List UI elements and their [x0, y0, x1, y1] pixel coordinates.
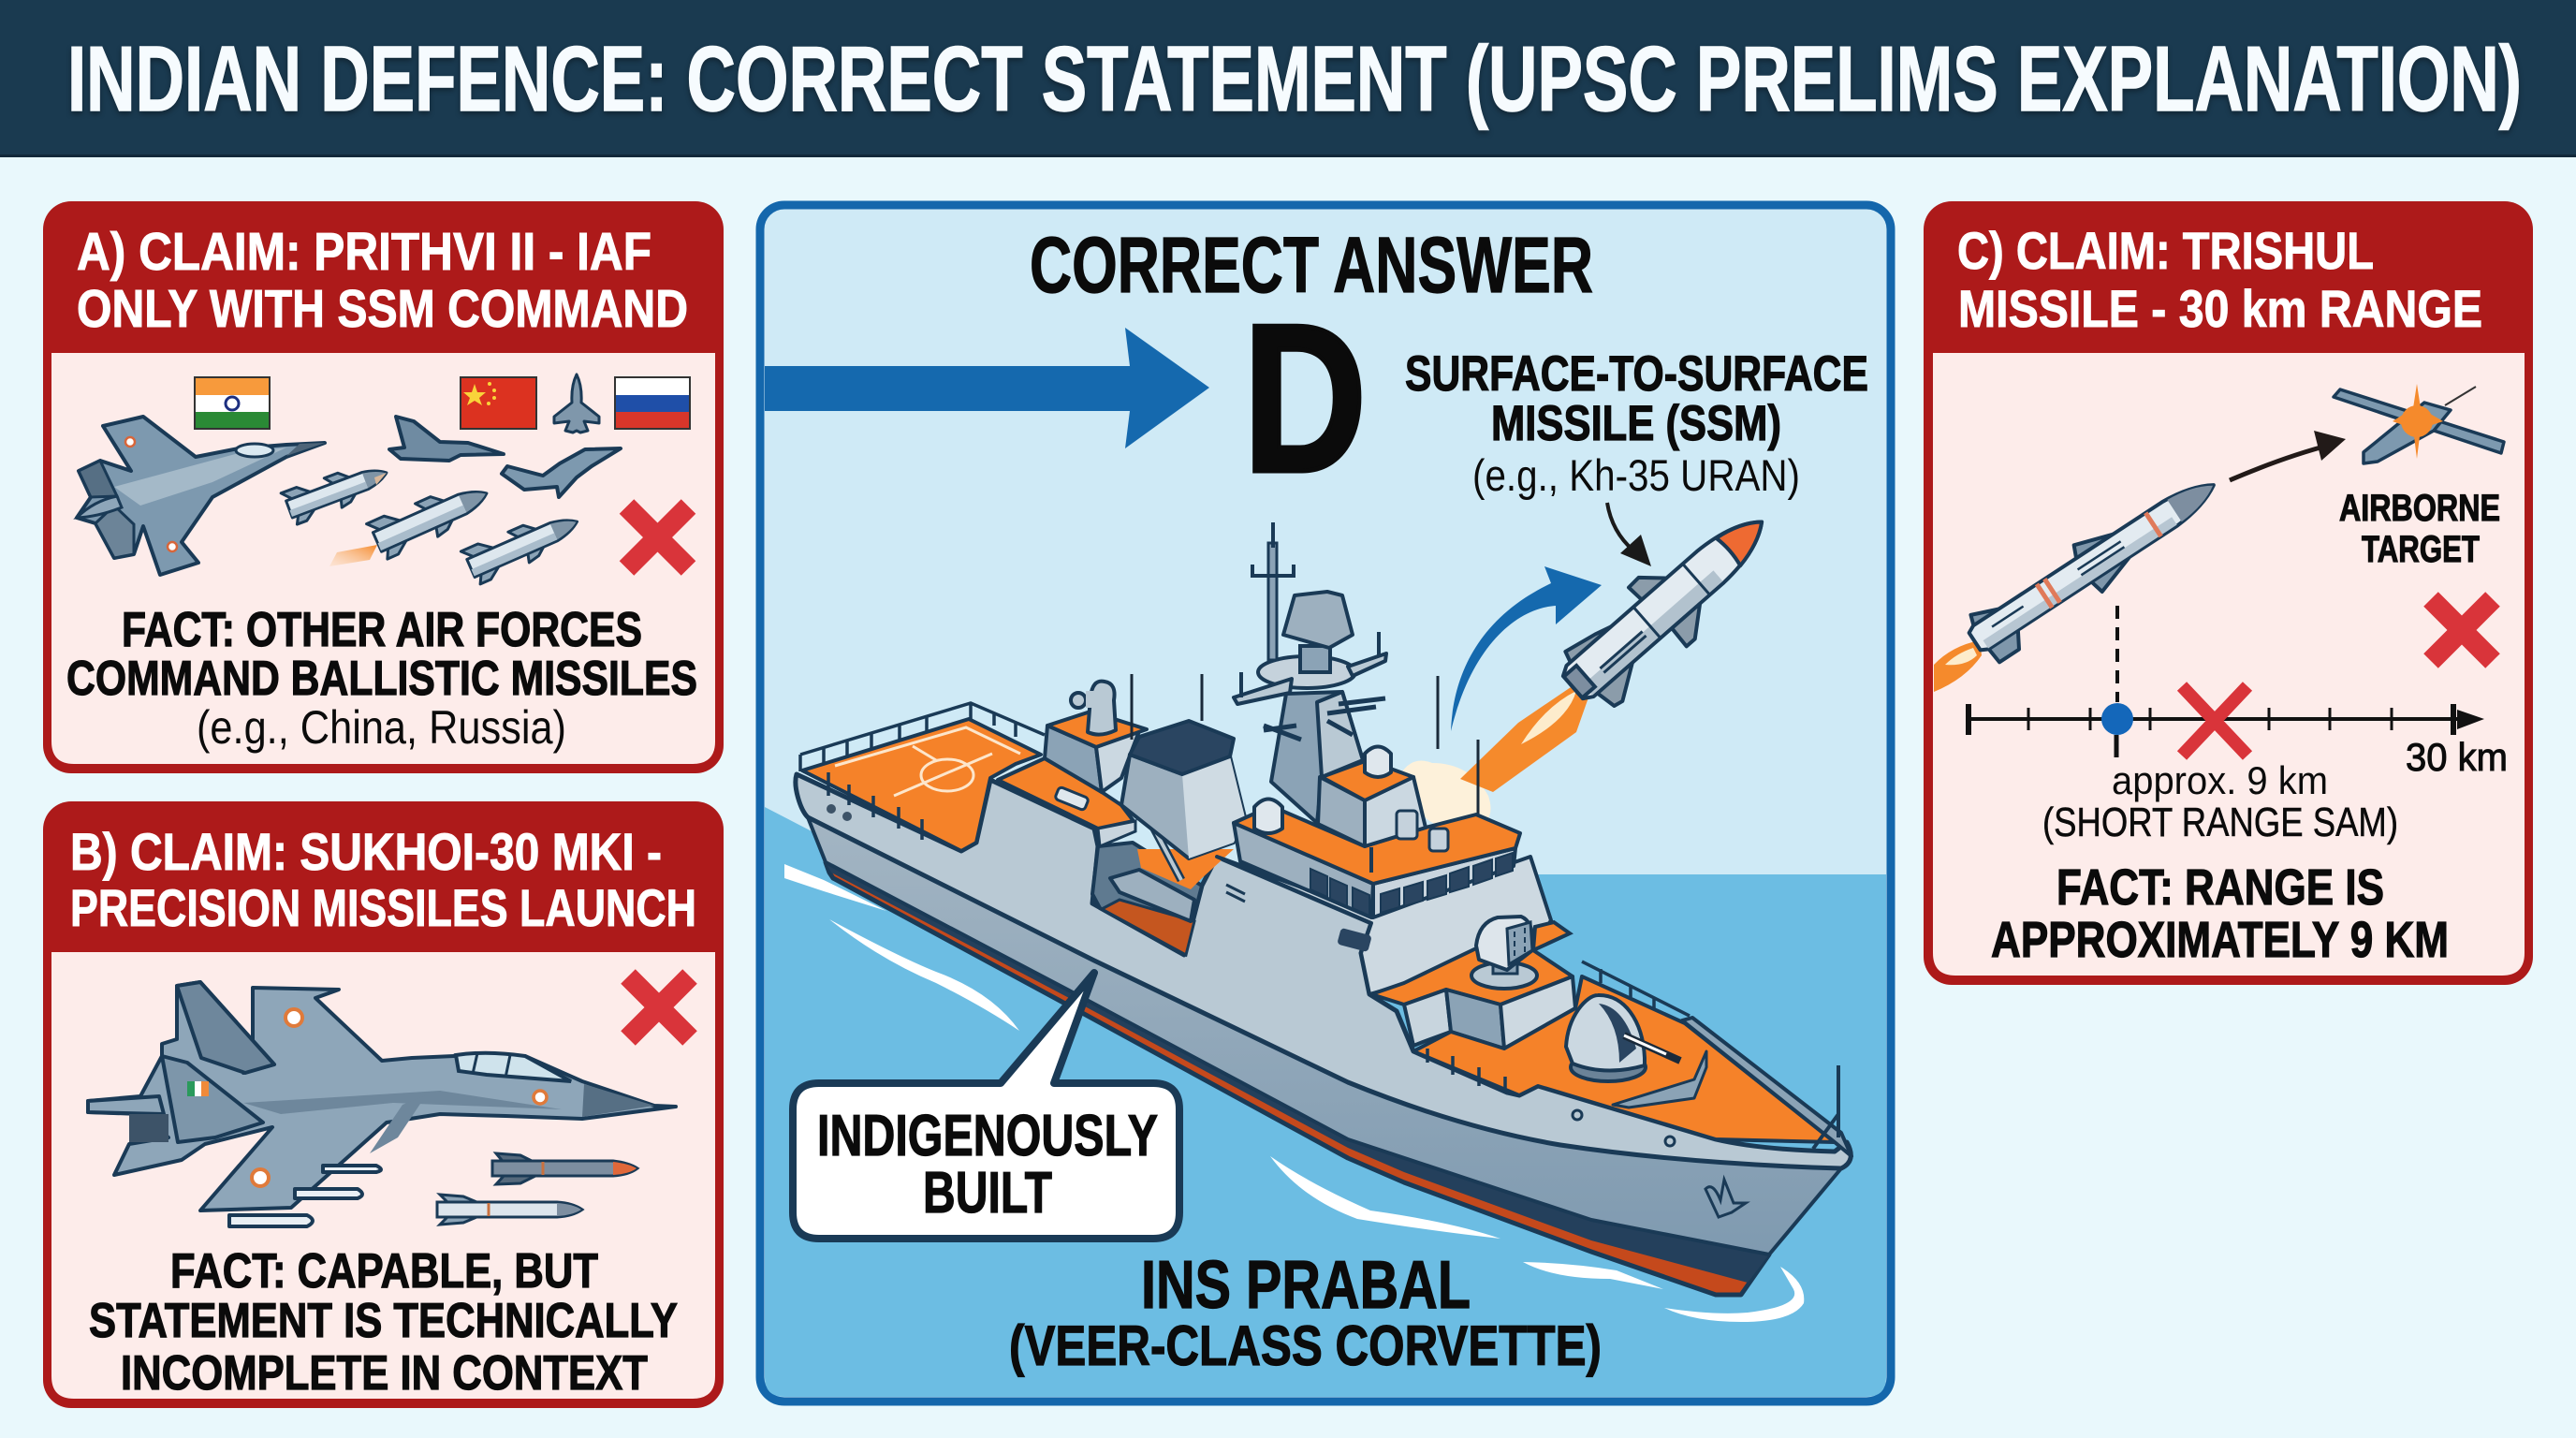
- callout: indigenously built: BUILT: [923, 1161, 1052, 1225]
- heading: claim C: MISSILE - 30 km RANGE: [1958, 279, 2482, 338]
- icon: Trishul missile with flame: [1934, 463, 2231, 692]
- icon: China flag: [461, 377, 536, 429]
- ship name: INS PRABAL: [1141, 1248, 1471, 1323]
- text: fact C: [1991, 859, 2449, 968]
- text: airborne target: AIRBORNE: [2339, 488, 2500, 529]
- boat bay: [1092, 814, 1234, 955]
- range scale: (SHORT RANGE SAM): [2042, 800, 2398, 845]
- icon: jet 3: [502, 448, 621, 497]
- wave strokes: [784, 864, 1804, 1322]
- panel: correct answer: [760, 205, 1891, 1401]
- hull light side: [796, 774, 1851, 1168]
- icon: airborne target: [2334, 384, 2504, 463]
- bridge block: [1217, 806, 1551, 994]
- heading: correct answer: CORRECT ANSWER: [1030, 221, 1593, 309]
- heading: claim B: PRECISION MISSILES LAUNCH: [70, 878, 696, 937]
- heading: claim A: A) CLAIM: PRITHVI II - IAF: [77, 222, 651, 282]
- icon: missile 1: [281, 456, 392, 526]
- text: fact A: COMMAND BALLISTIC MISSILES: [66, 652, 697, 706]
- hull grey band: [808, 817, 1841, 1255]
- icon: fighter jet: [77, 417, 325, 575]
- heading: claim B: B) CLAIM: SUKHOI-30 MKI -: [70, 822, 662, 881]
- hull keel red band: [826, 862, 1769, 1295]
- panel: claim C: [1924, 201, 2533, 985]
- text: fact A: (e.g., China, Russia): [197, 701, 566, 754]
- icon: missile 3: [461, 504, 584, 586]
- icon: Sukhoi-30 MKI jet: [88, 982, 676, 1226]
- arrow: missile to target: [2230, 431, 2346, 480]
- text: fact A: FACT: OTHER AIR FORCES: [122, 603, 642, 657]
- heading: claim C: C) CLAIM: TRISHUL: [1957, 221, 2374, 280]
- callout: indigenously built: [793, 973, 1179, 1239]
- upper deckhouse: [1254, 747, 1448, 873]
- text: airborne target: [2339, 488, 2500, 570]
- arrow: label to missile: [1607, 503, 1651, 566]
- main gun: [1566, 995, 1680, 1081]
- CIWS mount: [1471, 917, 1537, 989]
- ship name: [1009, 1248, 1602, 1377]
- text: fact B: INCOMPLETE IN CONTEXT: [121, 1346, 648, 1401]
- illustration: INS Prabal corvette: [784, 522, 1852, 1322]
- icon: India flag: [195, 377, 270, 429]
- flame and smoke: [1397, 683, 1588, 831]
- mid orange deck: [998, 758, 1134, 829]
- icon: red cross: [627, 506, 689, 568]
- text: surface-to-surface missile: SURFACE-TO-SURFACE: [1405, 346, 1868, 402]
- title banner: [0, 0, 2576, 157]
- arrow: pointing to answer: [765, 328, 1209, 448]
- hull dark band: [826, 862, 1769, 1283]
- mast: [1234, 522, 1386, 823]
- range scale: approx. 9 km: [2112, 758, 2328, 802]
- text: airborne target: TARGET: [2362, 529, 2480, 570]
- text: fact B: STATEMENT IS TECHNICALLY: [89, 1294, 678, 1348]
- arrow: missile trajectory: [1451, 566, 1602, 731]
- text: fact B: FACT: CAPABLE, BUT: [170, 1244, 598, 1299]
- funnel: [1121, 721, 1245, 858]
- foredeck: [1371, 922, 1852, 1217]
- range scale: [1969, 606, 2508, 845]
- text: fact C: FACT: RANGE IS: [2056, 859, 2384, 916]
- text: surface-to-surface missile: [1405, 346, 1868, 500]
- text: fact C: APPROXIMATELY 9 KM: [1991, 912, 2449, 968]
- deck block with exhaust: [1045, 682, 1147, 792]
- heading: claim C: [1957, 221, 2482, 338]
- text: surface-to-surface missile: (e.g., Kh-35 URAN): [1472, 450, 1800, 500]
- heading: claim B: [70, 822, 696, 937]
- ship name: (VEER-CLASS CORVETTE): [1009, 1314, 1602, 1377]
- deck railing: [800, 703, 1045, 771]
- helideck: [802, 719, 1041, 851]
- icon: small jet top view: [554, 374, 599, 433]
- callout: indigenously built: INDIGENOUSLY: [817, 1104, 1158, 1168]
- icon: jet 2: [389, 417, 504, 461]
- text: surface-to-surface missile: MISSILE (SSM): [1491, 396, 1781, 451]
- icon: missile 2 with flame: [329, 474, 494, 566]
- answer letter D: D: [1243, 280, 1367, 516]
- icon: missile with red nose: [492, 1153, 637, 1184]
- text: fact B: [89, 1244, 678, 1401]
- text: fact A: [66, 603, 697, 754]
- sea: [765, 807, 1886, 1397]
- icon: Russia flag: [615, 377, 690, 429]
- heading: claim A: [77, 222, 688, 339]
- icon: red cross: [628, 976, 690, 1038]
- range scale: 30 km: [2406, 735, 2508, 779]
- antenna lines: [1132, 674, 1478, 838]
- icon: silver missile: [437, 1195, 582, 1225]
- panel: claim B: [43, 801, 724, 1408]
- icon: launched missile: [1547, 492, 1791, 720]
- icon: red cross: [2431, 599, 2493, 661]
- heading: claim A: ONLY WITH SSM COMMAND: [77, 279, 688, 339]
- panel: claim A: [43, 201, 724, 773]
